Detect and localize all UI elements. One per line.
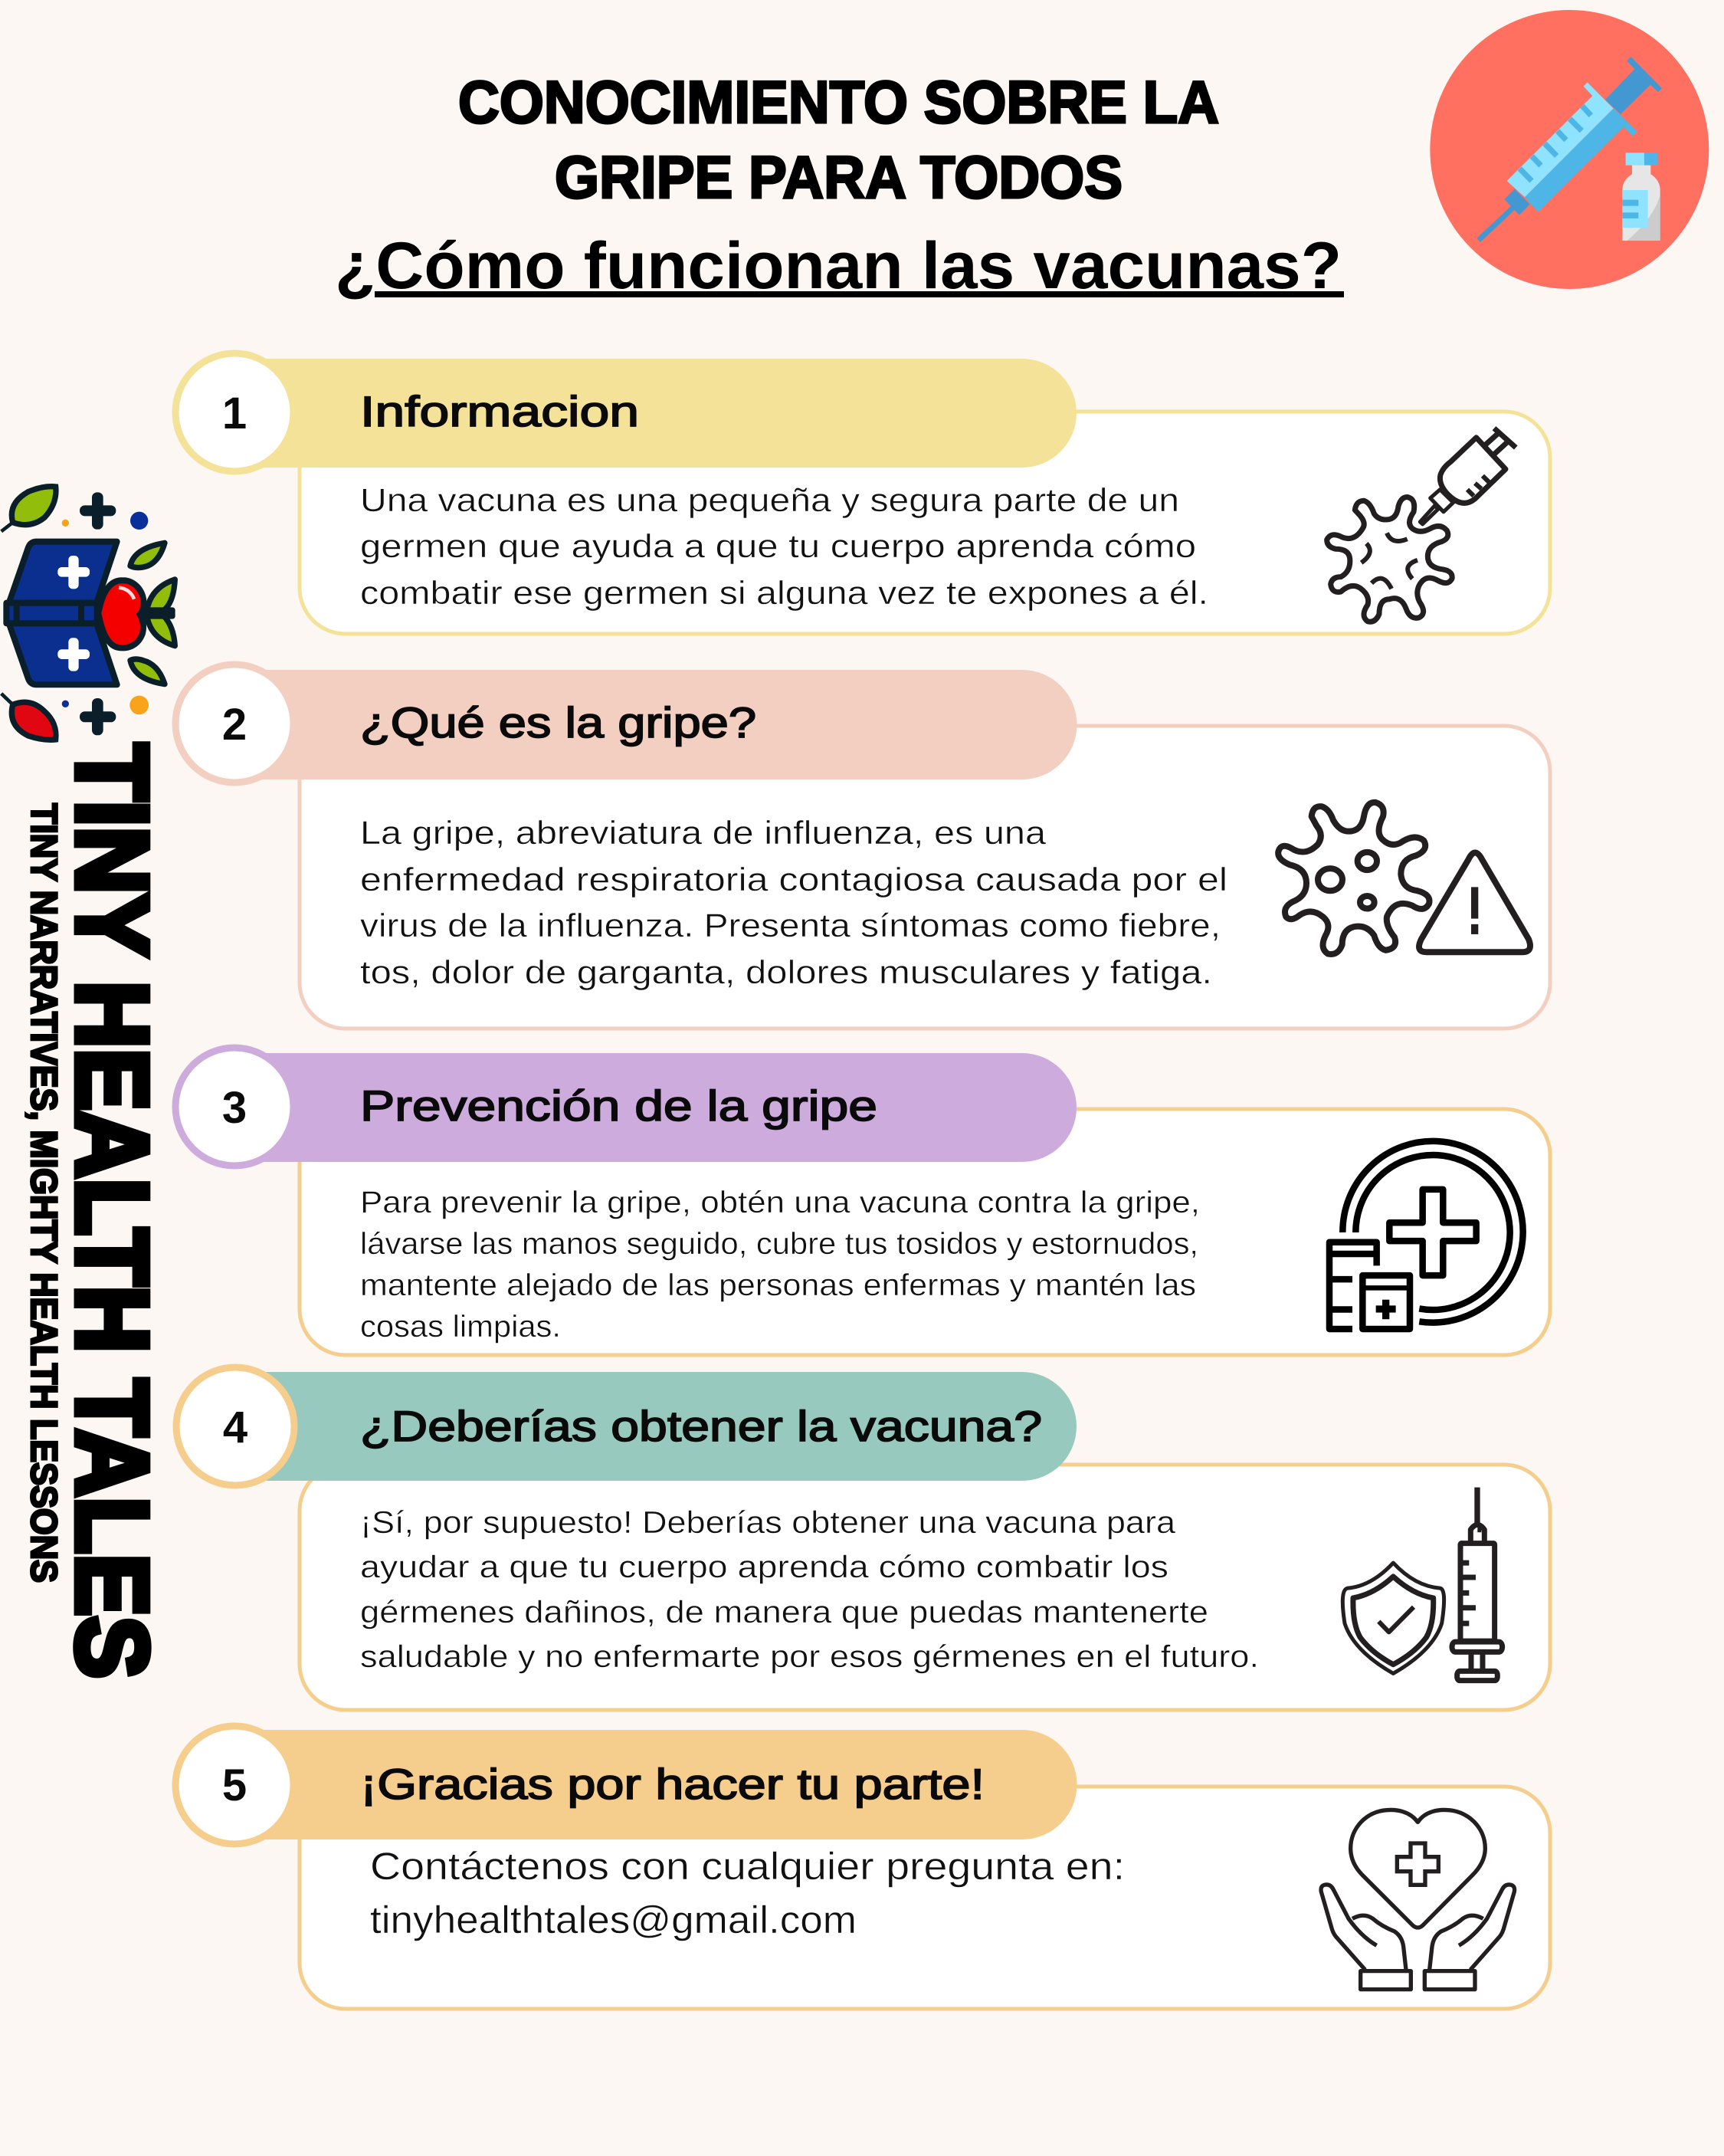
text block 2: virus de la influenza. Presenta síntomas como fiebre, xyxy=(360,907,1221,944)
card 3 body xyxy=(300,1109,1550,1355)
subtitle: how vaccines work: ¿Cómo funcionan las vacunas? xyxy=(335,229,1342,303)
heading bar 2: ¿Qué es la gripe? xyxy=(360,698,756,747)
icon: shield and syringe xyxy=(1342,1488,1503,1681)
logo: top-left leaf xyxy=(2,487,56,531)
heading bar 1 xyxy=(245,359,1077,468)
icon: hands holding heart xyxy=(1321,1810,1515,1990)
heading bar 3: Prevención de la gripe xyxy=(360,1081,877,1130)
panel 3: Prevención de la gripe xyxy=(175,1048,1550,1355)
heading bar 5: ¡Gracias por hacer tu parte! xyxy=(360,1760,985,1808)
text block 3: lávarse las manos seguido, cubre tus tosidos y estornudos, xyxy=(360,1227,1198,1261)
logo wordmark: TINY HEALTH TALES: TINY HEALTH TALES xyxy=(56,743,169,1679)
logo: apple leaves xyxy=(130,543,175,684)
text block 1: germen que ayuda a que tu cuerpo aprenda cómo xyxy=(360,528,1196,565)
icon: syringe injecting virus xyxy=(1327,428,1516,622)
title: CONOCIMIENTO SOBRE LA xyxy=(458,68,1219,136)
heading bar 4 xyxy=(245,1372,1077,1481)
title: GRIPE PARA TODOS xyxy=(555,143,1123,211)
text block 2: tos, dolor de garganta, dolores musculares y fatiga. xyxy=(360,954,1212,991)
heading bar 4: ¿Deberías obtener la vacuna? xyxy=(360,1402,1042,1450)
text block 4: gérmenes dañinos, de manera que puedas mantenerte xyxy=(360,1594,1208,1629)
text block 1 xyxy=(360,482,1208,612)
icon: virus with warning triangle xyxy=(1278,802,1530,954)
icon: syringe and vial on coral circle xyxy=(1430,10,1709,289)
heading bar 2 xyxy=(245,670,1077,779)
text block 4 xyxy=(360,1505,1259,1674)
panel 1: Informacion xyxy=(175,353,1550,634)
number badge 3: 3 xyxy=(222,1083,247,1133)
number badge 5: 5 xyxy=(222,1761,247,1810)
text block 3: Para prevenir la gripe, obtén una vacuna contra la gripe, xyxy=(360,1186,1200,1219)
panel 5: ¡Gracias por hacer tu parte! xyxy=(175,1726,1550,2009)
text block 1: combatir ese germen si alguna vez te expones a él. xyxy=(360,575,1208,612)
number badge 2: 2 xyxy=(222,700,247,750)
contact text: tinyhealthtales@gmail.com xyxy=(370,1898,857,1941)
text block 4: saludable y no enfermarte por esos gérmenes en el futuro. xyxy=(360,1639,1259,1674)
heading bar 5 xyxy=(245,1730,1077,1839)
number badge 3 xyxy=(175,1048,293,1166)
logo: open book xyxy=(6,542,117,684)
heading bar 3 xyxy=(245,1053,1077,1162)
text block 4: ayudar a que tu cuerpo aprenda cómo combatir los xyxy=(360,1549,1168,1584)
text block 1: Una vacuna es una pequeña y segura parte de un xyxy=(360,482,1179,519)
number badge 2 xyxy=(175,665,293,783)
logo: crosses and dots xyxy=(62,492,149,735)
icon: medical cross and medicine boxes xyxy=(1329,1141,1523,1329)
panel 2: ¿Qué es la gripe? xyxy=(175,665,1550,1029)
text block 2: enfermedad respiratoria contagiosa causada por el xyxy=(360,861,1227,898)
logo tagline: TINY NARRATIVES, MIGHTY HEALTH LESSONS xyxy=(23,803,64,1583)
text block 3: cosas limpias. xyxy=(360,1310,561,1344)
number badge 4: 4 xyxy=(223,1403,247,1452)
logo: red leaf xyxy=(2,694,56,740)
text block 3: mantente alejado de las personas enfermas y mantén las xyxy=(360,1268,1196,1302)
card 2 body xyxy=(300,726,1550,1029)
logo: book crosses xyxy=(57,556,90,671)
card 4 body xyxy=(300,1465,1550,1710)
logo emblem: book, apple and leaves xyxy=(2,487,175,740)
text block 3 xyxy=(360,1186,1200,1344)
card 5 body xyxy=(300,1787,1550,2009)
number badge 1 xyxy=(175,353,293,471)
card 1 body xyxy=(300,412,1550,634)
title xyxy=(458,68,1219,211)
logo: apple xyxy=(98,580,144,648)
number badge 1: 1 xyxy=(222,389,247,438)
number badge 4 xyxy=(176,1367,294,1485)
contact text: Contáctenos con cualquier pregunta en: xyxy=(370,1845,1125,1888)
contact text xyxy=(370,1845,1125,1941)
text block 2: La gripe, abreviatura de influenza, es una xyxy=(360,815,1046,852)
text block 4: ¡Sí, por supuesto! Deberías obtener una vacuna para xyxy=(360,1505,1175,1540)
number badge 5 xyxy=(175,1726,293,1844)
heading bar 1: Informacion xyxy=(360,387,639,435)
text block 2 xyxy=(360,815,1227,991)
panel 4: ¿Deberías obtener la vacuna? xyxy=(176,1367,1550,1710)
